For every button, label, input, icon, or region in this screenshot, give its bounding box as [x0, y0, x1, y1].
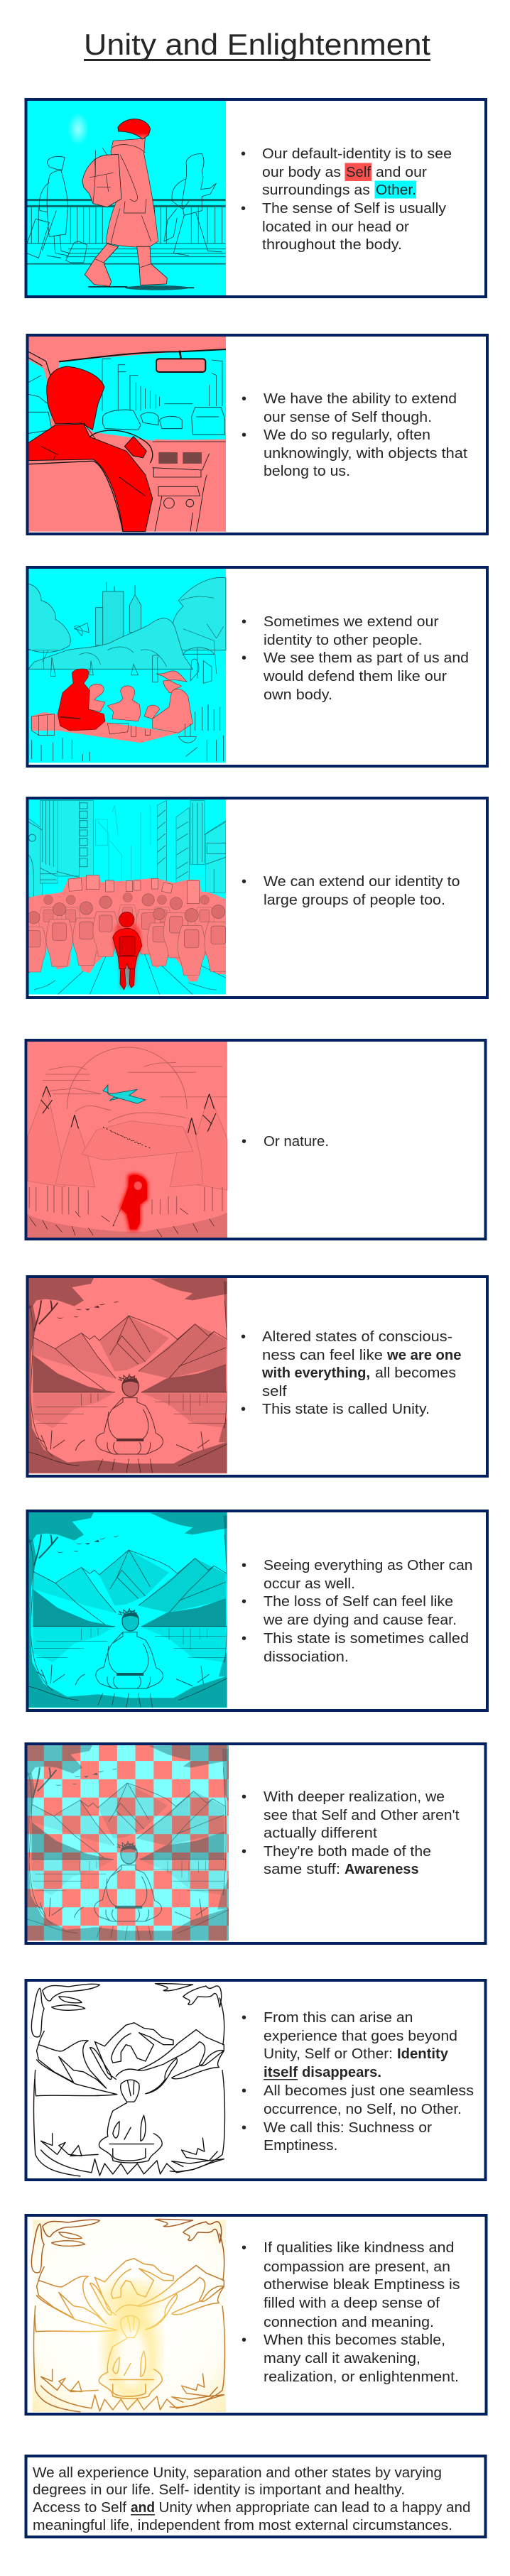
text: extending to objects: unknowingly, with objects that — [264, 446, 467, 462]
text: extending to people: would defend them like our — [263, 669, 447, 684]
panel: extending to nature — [26, 1039, 486, 1239]
text: extending to objects: • — [242, 427, 246, 443]
text: extending to people: • — [242, 650, 246, 666]
text: awareness: They're both made of the — [264, 1844, 431, 1860]
panel: enlightenment — [26, 2215, 486, 2414]
text: dissociation: we are dying and cause fear. — [263, 1612, 457, 1628]
text: dissociation: • — [242, 1558, 246, 1573]
illustration: crowd marching in city street — [21, 798, 232, 995]
text: emptiness: • — [242, 2083, 246, 2099]
text: awareness: With deeper realization, we — [264, 1789, 445, 1805]
text: extending to people: • — [242, 614, 246, 630]
text: emptiness: Identity — [397, 2046, 449, 2062]
text: enlightenment: If qualities like kindness and — [264, 2240, 455, 2256]
text: default identity: located in our head or — [262, 219, 409, 235]
text: conclusion: degrees in our life. Self- identity is important and healthy. — [33, 2482, 405, 2498]
text: emptiness: Emptiness. — [264, 2138, 338, 2154]
panel: extending to people — [27, 567, 487, 766]
illustration: walker in red coat on bridge — [27, 101, 226, 296]
text: default identity: Other. — [376, 182, 416, 198]
text: extending to objects: our sense of Self though. — [264, 410, 432, 425]
text: unity: with everything, — [261, 1365, 370, 1381]
text: enlightenment: filled with a deep sense of — [264, 2296, 440, 2311]
panel: extending to groups — [21, 798, 487, 998]
text: extending to objects: • — [242, 391, 246, 407]
text: dissociation — [242, 1558, 473, 1665]
text: conclusion — [33, 2465, 470, 2533]
text: default identity: The sense of Self is usually — [262, 201, 446, 217]
text: extending to people — [242, 614, 469, 703]
illustration: meditator in salmon landscape — [27, 1277, 231, 1475]
text: awareness: Awareness — [344, 1862, 419, 1877]
text: conclusion: Access to Self — [33, 2500, 126, 2516]
illustration: driver in car — [28, 335, 226, 532]
panel: extending to objects — [27, 335, 487, 534]
text: awareness — [242, 1789, 460, 1877]
text: dissociation: dissociation. — [264, 1649, 349, 1665]
text: awareness: same stuff: — [264, 1862, 340, 1877]
text: default identity: surroundings as — [262, 182, 370, 198]
text: dissociation: This state is sometimes called — [264, 1631, 469, 1647]
panel: dissociation — [27, 1511, 487, 1710]
text: default identity: • — [241, 201, 246, 217]
text: extending to people: own body. — [264, 687, 332, 703]
text: extending to groups — [242, 874, 460, 908]
illustration: hiker in forest with plane — [28, 1039, 227, 1238]
text: unity: This state is called Unity. — [262, 1402, 430, 1417]
text: default identity: Self — [346, 165, 371, 180]
text: conclusion: and — [131, 2500, 155, 2516]
text: emptiness: disappears. — [302, 2065, 381, 2080]
text: awareness: • — [242, 1789, 246, 1805]
text: enlightenment: realization, or enlightenment. — [264, 2369, 459, 2385]
text: extending to people: We see them as part of us and — [264, 650, 469, 666]
title: Unity and Enlightenment — [84, 28, 430, 61]
text: emptiness: occurrence, no Self, no Other. — [264, 2102, 462, 2117]
text: emptiness: itself — [264, 2065, 298, 2080]
text: extending to groups: • — [242, 874, 246, 890]
text: default identity: • — [241, 146, 246, 162]
text: unity: Altered states of conscious- — [262, 1329, 452, 1345]
text: dissociation: The loss of Self can feel like — [264, 1594, 453, 1610]
text: extending to nature: • — [242, 1134, 246, 1150]
text: default identity: Our default-identity is to see — [262, 146, 452, 162]
illustration: meditator in cyan landscape — [27, 1511, 231, 1710]
text: extending to objects: belong to us. — [264, 464, 350, 479]
text: emptiness: We call this: Suchness or — [264, 2120, 432, 2136]
text: default identity: and our — [376, 165, 427, 180]
illustration: black outline landscape — [31, 1984, 224, 2176]
text: enlightenment: • — [242, 2332, 246, 2348]
illustration: glowing golden outline landscape — [31, 2220, 226, 2412]
illustration: family picnic in park — [28, 567, 226, 763]
text: default identity: our body as — [262, 165, 341, 180]
text: conclusion: We all experience Unity, separation and other states by varying — [33, 2465, 442, 2481]
text: unity: • — [241, 1402, 246, 1417]
text: extending to people: Sometimes we extend our — [264, 614, 439, 630]
text: extending to people: identity to other people. — [264, 633, 422, 648]
illustration: meditator over checkerboard — [26, 1744, 229, 1943]
text: unity: • — [241, 1329, 246, 1345]
panel: emptiness — [26, 1980, 486, 2180]
text: unity: we are one — [386, 1348, 462, 1363]
text: dissociation: occur as well. — [264, 1576, 355, 1592]
text: emptiness: • — [242, 2010, 246, 2026]
panel: awareness — [26, 1744, 486, 1943]
text: enlightenment: When this becomes stable, — [264, 2332, 445, 2348]
text: dissociation: Seeing everything as Other can — [264, 1558, 473, 1573]
text: emptiness: Unity, Self or Other: — [264, 2046, 393, 2062]
text: unity: all becomes — [375, 1365, 456, 1381]
panel: default identity — [25, 98, 487, 298]
text: emptiness: From this can arise an — [264, 2010, 413, 2026]
text: enlightenment: otherwise bleak Emptiness is — [264, 2277, 460, 2293]
text: emptiness: All becomes just one seamless — [264, 2083, 474, 2099]
text: extending to nature: Or nature. — [264, 1134, 329, 1150]
text: emptiness — [242, 2010, 474, 2154]
text: conclusion: Unity when appropriate can lead to a happy and — [159, 2500, 470, 2516]
panel: conclusion — [26, 2456, 486, 2537]
text: extending to objects: We have the ability to extend — [264, 391, 457, 407]
panel: unity — [27, 1277, 487, 1476]
text: enlightenment: many call it awakening, — [264, 2351, 421, 2367]
text: enlightenment: compassion are present, an — [264, 2259, 450, 2275]
text: default identity — [241, 146, 452, 253]
text: extending to groups: large groups of people too. — [264, 893, 445, 908]
text: awareness: actually different — [264, 1825, 377, 1841]
text: dissociation: • — [242, 1594, 246, 1610]
text: dissociation: • — [242, 1631, 246, 1647]
text: conclusion: meaningful life, independent from most external circumstances. — [33, 2518, 452, 2533]
text: enlightenment: connection and meaning. — [264, 2315, 434, 2330]
text: enlightenment: • — [242, 2240, 246, 2256]
text: unity — [241, 1329, 462, 1417]
text: extending to objects — [242, 391, 467, 479]
text: awareness: • — [242, 1844, 246, 1860]
text: default identity: throughout the body. — [262, 237, 402, 253]
text: emptiness: experience that goes beyond — [264, 2029, 457, 2044]
text: awareness: see that Self and Other aren't — [264, 1808, 460, 1823]
text: emptiness: • — [242, 2120, 246, 2136]
text: extending to groups: We can extend our identity to — [264, 874, 460, 890]
text: unity: self — [262, 1384, 287, 1399]
text: unity: ness can feel like — [262, 1348, 383, 1363]
text: enlightenment — [242, 2240, 460, 2385]
text: extending to objects: We do so regularly, often — [264, 427, 430, 443]
